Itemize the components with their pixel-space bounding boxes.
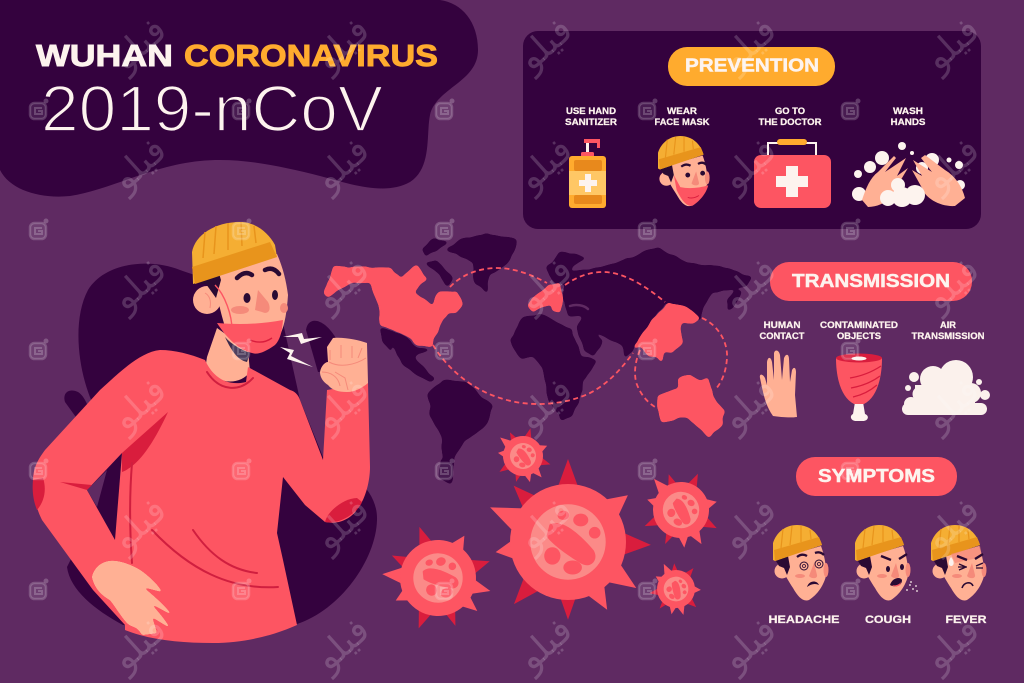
- watermark pattern: فيلو: [712, 370, 785, 441]
- sweater shading: [33, 412, 362, 522]
- watermark pattern: فيلو: [508, 10, 581, 81]
- watermark pattern: فيلو: [915, 10, 988, 81]
- label: air transmission: [912, 320, 984, 341]
- title word: Wuhan: WUHAN: [36, 38, 173, 73]
- map: dark continents: [379, 233, 753, 485]
- section: symptoms: [768, 457, 987, 626]
- watermark pattern: فيلو: [508, 490, 581, 561]
- label: wear face mask: WEAR: [667, 106, 698, 116]
- face mask: [215, 285, 283, 354]
- watermark pattern: فيلو: [915, 370, 988, 441]
- watermark pattern: فيلو: [508, 130, 581, 201]
- watermark pattern: فيلو: [508, 250, 581, 321]
- hand on hip: [92, 561, 172, 635]
- watermark pattern: فيلو: [712, 130, 785, 201]
- label: fever: FEVER: [946, 614, 987, 626]
- virus: large centre: [484, 459, 651, 620]
- heading: prevention: PREVENTION: [685, 54, 819, 76]
- map: seas: [570, 305, 588, 309]
- label: use hand sanitizer: SANITIZER: [565, 117, 618, 127]
- world map: [324, 233, 753, 485]
- label: human contact: [760, 320, 805, 341]
- character coughing: [33, 222, 370, 643]
- watermark pattern: فيلو: [102, 610, 175, 681]
- icon: contaminated meat: [836, 354, 882, 421]
- panel: prevention: [523, 31, 981, 229]
- watermark pattern: فيلو: [508, 370, 581, 441]
- neck band: [225, 337, 250, 362]
- head: [192, 222, 288, 362]
- title: [36, 38, 438, 145]
- character blob background: [64, 264, 377, 625]
- watermark pattern: فيلو: [102, 250, 175, 321]
- title blob: [0, 0, 478, 197]
- watermark pattern: فيلو: [305, 490, 378, 561]
- label: wear face mask: [654, 106, 710, 127]
- title word: Coronavirus: CORONAVIRUS: [184, 38, 438, 73]
- icon: washing hands: [852, 142, 965, 207]
- watermark pattern: فيلو: [915, 610, 988, 681]
- label: wear face mask: FACE MASK: [654, 117, 710, 127]
- icon: headache face: [773, 525, 828, 600]
- label: contaminated objects: [820, 320, 899, 341]
- label: wash hands: HANDS: [890, 117, 926, 127]
- label: go to the doctor: GO TO: [775, 106, 805, 116]
- heading: transmission: TRANSMISSION: [792, 270, 950, 291]
- heading: symptoms: SYMPTOMS: [818, 465, 935, 486]
- neck: [205, 328, 250, 382]
- label: go to the doctor: THE DOCTOR: [758, 117, 822, 127]
- icon: air cloud: [902, 360, 990, 415]
- watermark pattern: فيلو: [712, 610, 785, 681]
- sweater: [33, 350, 370, 643]
- beanie: [192, 222, 277, 284]
- virus: lower left: [368, 508, 507, 645]
- sweater lines: [130, 372, 278, 587]
- map: dashed spread routes: [433, 268, 727, 407]
- watermark pattern: فيلو: [915, 130, 988, 201]
- icon: sanitizer bottle: [569, 139, 606, 208]
- watermark pattern: فيلو: [102, 10, 175, 81]
- heading: symptoms: [796, 457, 957, 496]
- label: use hand sanitizer: USE HAND: [566, 106, 617, 116]
- icon: cough face: [855, 525, 918, 600]
- watermark pattern: فيلو: [102, 370, 175, 441]
- watermark pattern: فيلو: [305, 130, 378, 201]
- fist: [320, 338, 368, 392]
- watermark pattern: فيلو: [915, 250, 988, 321]
- label: wash hands: WASH: [893, 106, 923, 116]
- cough lightning: [280, 333, 322, 367]
- panel background: [523, 31, 981, 229]
- watermark pattern: فيلو: [712, 250, 785, 321]
- watermark pattern: فيلو: [508, 610, 581, 681]
- watermark pattern: فيلو: [712, 10, 785, 81]
- watermark pattern: فيلو: [102, 130, 175, 201]
- title line: 2019-nCoV: 2019-nCoV: [41, 72, 384, 145]
- section: transmission: [760, 262, 990, 421]
- label: cough: COUGH: [865, 614, 911, 626]
- watermark pattern: فيلو: [915, 490, 988, 561]
- heading: transmission: [770, 262, 972, 301]
- label: human contact: HUMAN: [764, 320, 800, 330]
- arm gap: [87, 453, 122, 540]
- icon: first aid kit: [754, 139, 831, 208]
- label: use hand sanitizer: [565, 106, 618, 127]
- label: wash hands: [890, 106, 926, 127]
- watermark pattern: فيلو: [102, 490, 175, 561]
- label: air transmission: TRANSMISSION: [912, 331, 984, 341]
- label: headache: HEADACHE: [768, 614, 840, 626]
- watermark pattern: فيلو: [305, 610, 378, 681]
- virus: top small: [488, 421, 558, 489]
- virus: right: [629, 457, 734, 561]
- icon: hand: [760, 351, 797, 417]
- watermark pattern: فيلو: [305, 10, 378, 81]
- watermark pattern: فيلو: [712, 490, 785, 561]
- label: go to the doctor: [758, 106, 822, 127]
- label: contaminated objects: OBJECTS: [837, 331, 881, 341]
- watermark pattern: فيلو: [305, 370, 378, 441]
- icon: fever face: [931, 525, 986, 600]
- map: infected regions: [324, 265, 725, 438]
- virus: lower right: [639, 551, 714, 626]
- label: contaminated objects: CONTAMINATED: [820, 320, 899, 330]
- icon: face with mask: [658, 136, 710, 206]
- heading: prevention: [668, 47, 835, 86]
- label: air transmission: AIR: [940, 320, 957, 330]
- watermark pattern: فيلو: [305, 250, 378, 321]
- label: human contact: CONTACT: [760, 331, 805, 341]
